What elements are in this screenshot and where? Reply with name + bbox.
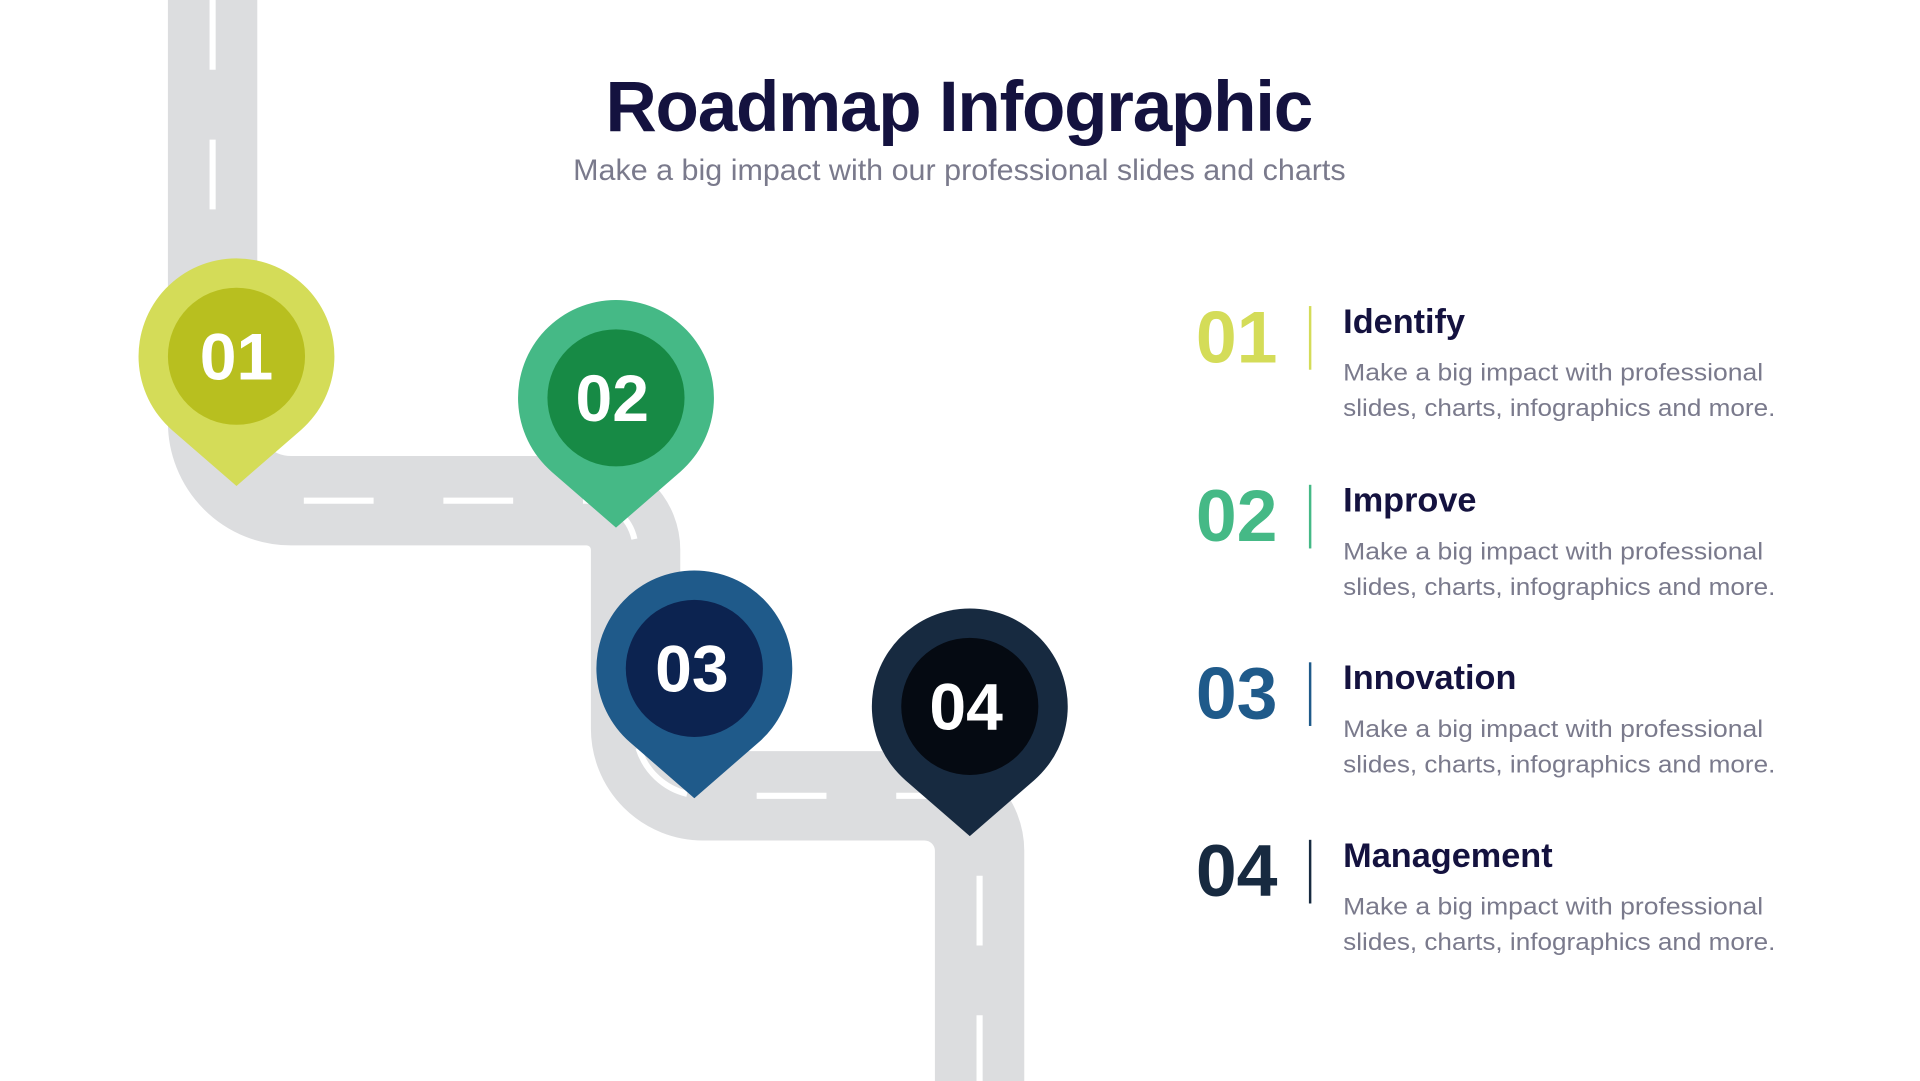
step 02 text: Improve: [1343, 482, 1476, 520]
step 03 text: Innovation: [1343, 659, 1516, 697]
pin 04: 04: [929, 671, 1003, 745]
step 04 text: slides, charts, infographics and more.: [1343, 929, 1775, 956]
step 02 text: Make a big impact with professional: [1343, 538, 1763, 565]
step 01 text: Make a big impact with professional: [1343, 360, 1763, 387]
pin 02: 02: [576, 362, 649, 436]
step 04 text: 04: [1196, 830, 1278, 912]
pin 01: [139, 258, 334, 486]
step 03 text: [1196, 653, 1775, 778]
step 01 text: [1196, 296, 1775, 422]
step 01 text: Identify: [1343, 303, 1465, 341]
step 04 text: Make a big impact with professional: [1343, 894, 1763, 921]
pin 04: [872, 608, 1068, 836]
step 01 text: slides, charts, infographics and more.: [1343, 395, 1775, 422]
subtitle: Make a big impact with our professional slides and charts: [573, 154, 1346, 187]
step 03 text: slides, charts, infographics and more.: [1343, 751, 1775, 778]
pin 01: 01: [200, 321, 273, 395]
pin 03: 03: [655, 633, 729, 707]
step 02 text: slides, charts, infographics and more.: [1343, 574, 1775, 601]
step 01 text: 01: [1196, 296, 1278, 378]
pin 03: [596, 571, 792, 798]
step 02 text: 02: [1196, 475, 1278, 557]
road: [213, 0, 980, 1081]
pin 02: [518, 300, 714, 528]
step 04 text: Management: [1343, 837, 1553, 875]
step 02 text: [1196, 475, 1775, 601]
step 03 text: 03: [1196, 653, 1278, 735]
step 04 text: [1196, 830, 1775, 956]
title: Roadmap Infographic: [606, 68, 1312, 147]
step 03 text: Make a big impact with professional: [1343, 716, 1763, 743]
